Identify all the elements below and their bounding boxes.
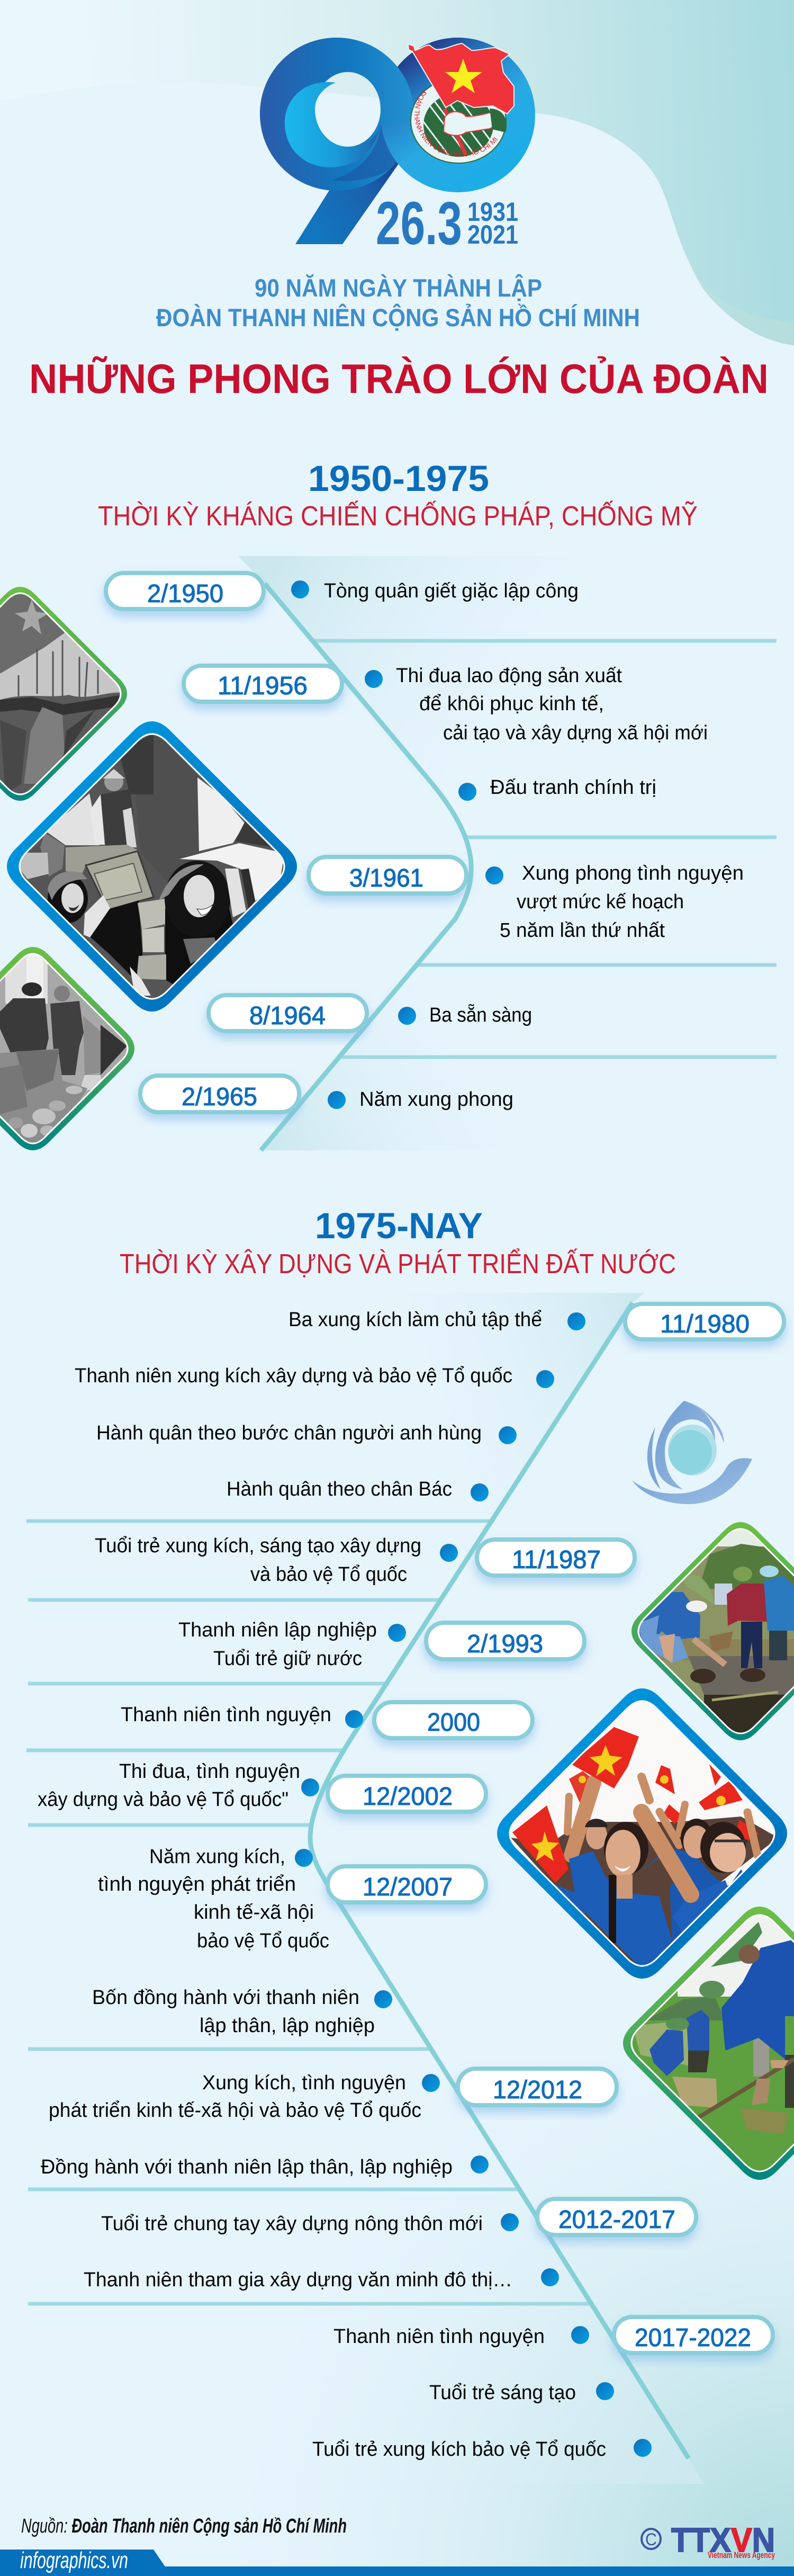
item: Ba sẵn sàng: [398, 1003, 532, 1026]
date pill: 2/1993: 2/1993: [467, 1630, 543, 1658]
item: Ba sẵn sàng: Ba sẵn sàng: [429, 1003, 532, 1026]
item: Thi đua lao động sản xuất: [365, 665, 708, 744]
item: Xung phong tình nguyện: 5 năm lần thứ nhất: [500, 919, 665, 942]
date pill: 2012-2017: [537, 2199, 696, 2235]
faces: [586, 1822, 607, 1849]
stacked boxes: [138, 899, 165, 929]
date pill: 2012-2017: 2012-2017: [558, 2206, 675, 2234]
logo: 90 years emblem: [260, 38, 535, 257]
item: Bốn đồng hành với thanh niên: Bốn đồng hành với thanh niên: [92, 1987, 359, 2009]
date pill: 2/1965: [140, 1076, 299, 1112]
item: Xung phong tình nguyện: [485, 862, 744, 942]
item: Thanh niên tình nguyện: Thanh niên tình nguyện: [121, 1704, 331, 1726]
item: Tuổi trẻ xung kích, sáng tạo xây dựng: Tuổi trẻ xung kích, sáng tạo xây dựng: [95, 1535, 421, 1557]
digit zero, lower front part: [381, 123, 535, 192]
youth union badge: [410, 85, 507, 164]
logo: TTXVN: TTXVN: [671, 2521, 775, 2559]
section heading: 1950-1975: THỜI KỲ KHÁNG CHIẾN CHỐNG PHÁP, CHỐNG MỸ: [98, 500, 698, 532]
photo: market women with fruit baskets: [0, 947, 138, 1155]
item: Thanh niên tham gia xây dựng văn minh đô thị: Thanh niên tham gia xây dựng văn minh đô thị…: [84, 2269, 512, 2291]
date pill: 2017-2022: 2017-2022: [635, 2324, 751, 2352]
date pill: 3/1961: [309, 857, 466, 893]
section heading: 1975-NAY: THỜI KỲ XÂY DỰNG VÀ PHÁT TRIỂN ĐẤT NƯỚC: [120, 1248, 676, 1280]
left woman: [48, 879, 88, 923]
item: Tuổi trẻ xung kích, sáng tạo xây dựng: và bảo vệ Tổ quốc: [250, 1563, 407, 1586]
white cloth at left: [46, 793, 100, 845]
item: Thanh niên tình nguyện 2017-2022: Thanh niên tình nguyện: [333, 2325, 545, 2348]
date pill: 2000: [374, 1702, 533, 1738]
logo: TTXVN: C: [645, 2530, 657, 2549]
item: Năm xung kích: tình nguyện phát triển: [98, 1873, 296, 1895]
date pill: 2017-2022: [614, 2317, 773, 2353]
heading: anniversary line 1: 90 NĂM NGÀY THÀNH LẬP: [255, 274, 542, 302]
item: Tòng quân giết giặc lập công: Tòng quân giết giặc lập công: [324, 580, 579, 602]
item: Tuổi trẻ sáng tạo: Tuổi trẻ sáng tạo: [429, 2382, 576, 2404]
item: Thanh niên lập nghiệp: [178, 1619, 406, 1670]
date pill: 8/1964: 8/1964: [249, 1002, 326, 1030]
item: Bốn đồng hành với thanh niên: [92, 1987, 392, 2037]
date pill: 8/1964: [209, 995, 367, 1031]
photo: soldiers with flag: [0, 583, 132, 805]
item: Thi đua, tình nguyện: xây dựng và bảo vệ Tổ quốc": [38, 1788, 288, 1811]
heading: anniversary line 2: ĐOÀN THANH NIÊN CỘNG SẢN HỒ CHÍ MINH: [156, 303, 640, 332]
date pill: 11/1980: [625, 1304, 784, 1339]
section heading: 1950-1975: [98, 458, 698, 532]
item: Năm xung kích: Năm xung kích,: [149, 1846, 285, 1868]
item: Xung kích, tình nguyện: phát triển kinh tế-xã hội và bảo vệ Tổ quốc: [49, 2099, 421, 2122]
item: Đấu tranh chính trị: Đấu tranh chính trị: [490, 776, 656, 799]
date 26.3: 26.3: [376, 190, 462, 257]
date pill: 12/2002: [328, 1776, 486, 1812]
item: Tuổi trẻ chung tay xây dựng nông thôn mới: Tuổi trẻ chung tay xây dựng nông thôn mới: [101, 2213, 483, 2235]
large flags: [571, 1727, 639, 1788]
right woman: [165, 861, 230, 909]
title: NHỮNG PHONG TRÀO LỚN CỦA ĐOÀN: [29, 355, 769, 402]
date pill: 11/1980: 11/1980: [660, 1310, 750, 1338]
photo: volunteers working in field: [623, 1907, 794, 2182]
raised arm in front: [642, 1812, 691, 1894]
date pill: 11/1987: 11/1987: [512, 1546, 601, 1574]
date pill: 11/1956: 11/1956: [218, 672, 308, 700]
item: Đồng hành với thanh niên lập thân, lập nghiệp: Đồng hành với thanh niên lập thân, lập nghiệp: [41, 2156, 453, 2178]
item: Hành quân theo bước chân người anh hùng: Hành quân theo bước chân người anh hùng: [96, 1422, 482, 1444]
item: Xung kích, tình nguyện: Xung kích, tình nguyện: [202, 2072, 406, 2094]
date pill: 3/1961: 3/1961: [349, 864, 423, 892]
date pill: 12/2012: 12/2012: [493, 2076, 582, 2104]
years 2021: 2021: [467, 220, 518, 249]
shirts: [569, 1851, 672, 1975]
item: Thi đua lao động sản xuất: để khôi phục kinh tế,: [419, 693, 604, 715]
item: Hành quân theo chân Bác: Hành quân theo chân Bác: [227, 1478, 452, 1500]
soldier: [101, 789, 133, 847]
footer bar: [0, 2547, 794, 2576]
white box at right: [179, 843, 285, 901]
photo: two women carrying boxes: [7, 721, 297, 1012]
date pill: 12/2007: 12/2007: [363, 1873, 453, 1901]
date pill: 2/1950: 2/1950: [147, 580, 223, 608]
item: Thi đua, tình nguyện: [38, 1760, 319, 1811]
date pill: 2/1965: 2/1965: [182, 1083, 257, 1111]
dark foliage and net behind: [114, 731, 199, 890]
item: Năm xung kích: [98, 1846, 329, 1952]
item: Xung phong tình nguyện: vượt mức kế hoạch: [517, 891, 684, 913]
small flags: [655, 1765, 675, 1794]
photo: youth waving flags: [497, 1688, 787, 1979]
item: Thi đua lao động sản xuất: Thi đua lao động sản xuất: [396, 665, 622, 687]
item: Tuổi trẻ xung kích bảo vệ Tổ quốc: Tuổi trẻ xung kích bảo vệ Tổ quốc: [312, 2438, 606, 2461]
item: Năm xung kích: bảo vệ Tổ quốc: [197, 1930, 329, 1952]
digit zero: [381, 38, 535, 192]
item: Thi đua, tình nguyện: Thi đua, tình nguyện: [119, 1760, 300, 1783]
years 1931: 1931: [467, 197, 518, 227]
section heading: 1975-NAY: [120, 1205, 676, 1280]
section heading: 1950-1975: 1950-1975: [308, 458, 489, 499]
crowd backdrop: [511, 1817, 778, 1975]
crate: [66, 845, 139, 874]
date pill: 11/1956: [184, 666, 342, 702]
item: Thanh niên lập nghiệp: Thanh niên lập nghiệp: [178, 1619, 377, 1641]
icon: youth swirl emblem: [632, 1401, 752, 1504]
item: Năm xung kích: kinh tế-xã hội: [194, 1901, 314, 1924]
dark clothing: [90, 900, 143, 977]
date pill: 12/2007: [328, 1866, 486, 1902]
white flag: [197, 777, 245, 851]
date pill: 12/2002: 12/2002: [363, 1783, 453, 1811]
item: Xung phong tình nguyện: Xung phong tình nguyện: [522, 862, 744, 884]
timeline panel: 1950-1975: [0, 556, 777, 1155]
section heading: 1975-NAY: 1975-NAY: [315, 1205, 483, 1246]
item: Năm xung phong: Năm xung phong: [359, 1088, 513, 1111]
item: Ba xung kích làm chủ tập thể: Ba xung kích làm chủ tập thể: [288, 1309, 542, 1331]
date pill: 2/1950: [106, 573, 264, 609]
item: Thanh niên lập nghiệp: Tuổi trẻ giữ nước: [213, 1648, 362, 1670]
item: Thanh niên xung kích xây dựng và bảo vệ Tổ quốc: Thanh niên xung kích xây dựng và bảo vệ Tổ quốc: [75, 1365, 512, 1387]
item: Bốn đồng hành với thanh niên: lập thân, lập nghiệp: [200, 2015, 375, 2037]
arms: [567, 1777, 757, 1855]
date pill: 2/1993: [426, 1623, 584, 1659]
footer bar: infographics.vn: [20, 2547, 128, 2573]
photo: volunteers planting: [630, 1520, 794, 1742]
digit nine: [260, 38, 414, 244]
date pill: 2000: 2000: [427, 1709, 480, 1737]
red flag: [408, 43, 514, 114]
date pill: 12/2012: [458, 2069, 617, 2105]
timeline panel: 1975-present: [26, 1293, 794, 2484]
item: Tuổi trẻ xung kích, sáng tạo xây dựng: [95, 1535, 458, 1586]
source note: Nguồn: Đoàn Thanh niên Cộng sản Hồ Chí Minh: [21, 2515, 347, 2537]
item: Thi đua lao động sản xuất: cải tạo và xây dựng xã hội mới: [443, 722, 708, 744]
item: Xung kích, tình nguyện: [49, 2072, 440, 2122]
date pill: 11/1987: [477, 1540, 635, 1576]
